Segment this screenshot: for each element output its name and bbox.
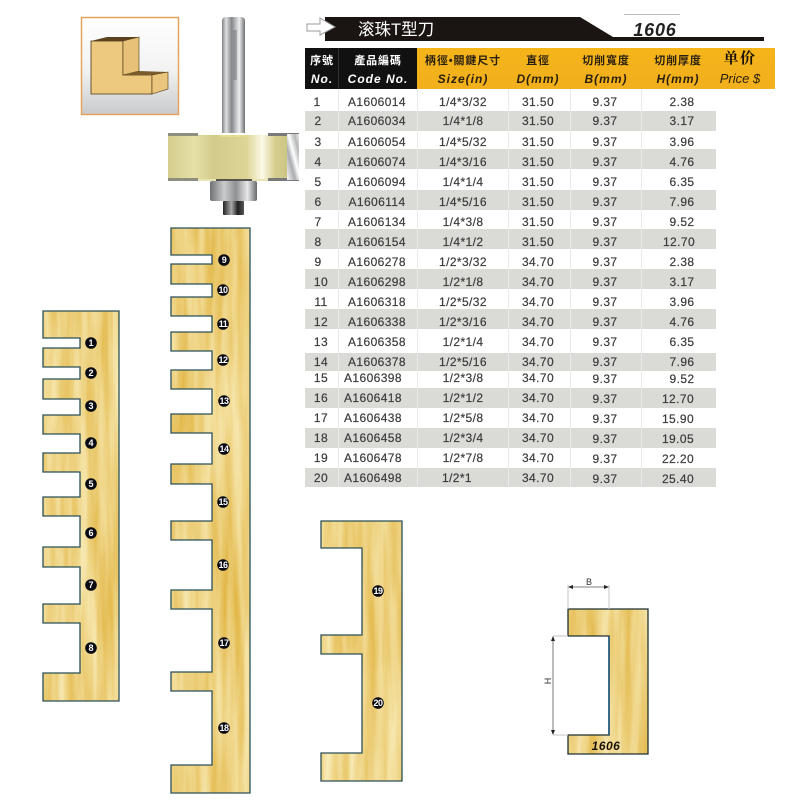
table rows: 31.50 [522,175,554,189]
table rows: 17 [314,411,328,425]
table header: 切削寬度 [582,53,630,67]
table rows: 1/2*5/32 [439,295,487,309]
table rows: 34.70 [522,411,554,425]
wood comb: cuts 9 to 18: 16 [218,560,228,570]
table rows: 1/4*3/8 [443,215,483,229]
table rows: 19 [314,451,328,465]
table rows: 1/2*1/4 [443,335,483,349]
table rows: 6.35 [670,175,694,189]
table header: Size(in) [438,72,488,86]
table header: D(mm) [516,72,560,86]
table rows: 9.37 [593,95,617,109]
table rows: A1606114 [348,195,406,209]
table rows: 6 [314,195,322,209]
table rows: 9 [314,255,322,269]
table rows: 6.35 [670,335,694,349]
table rows: 3 [314,135,322,149]
table rows: 1/2*5/16 [439,355,487,369]
table rows: 1/4*1/4 [443,175,483,189]
table rows: 1/4*5/32 [439,135,487,149]
table rows: 15 [314,371,328,385]
wood comb: cuts 1 to 8: 4 [88,438,94,448]
wood comb: cuts 1 to 8 [43,311,119,701]
table rows: A1606358 [348,335,406,349]
table rows: A1606398 [344,371,402,385]
table rows: 34.70 [522,255,554,269]
table rows: 4 [314,155,322,169]
table header: 切削厚度 [654,53,702,67]
table rows: 9.37 [593,195,617,209]
header banner: 滚珠T型刀 [358,20,434,39]
table rows: 9.37 [593,432,617,446]
table rows: 31.50 [522,135,554,149]
table rows: 16 [314,391,328,405]
table rows: A1606054 [348,135,406,149]
table rows: 8 [314,235,322,249]
table rows: 34.70 [522,451,554,465]
wood comb: cuts 1 to 8: 7 [88,580,94,590]
table rows: A1606378 [348,355,406,369]
wood comb: cuts 9 to 18: 15 [218,497,228,507]
table rows: 2.38 [670,255,694,269]
table rows: 2 [314,114,322,128]
table header: 產品編碼 [354,53,402,67]
table rows: 15.90 [662,412,694,426]
table rows: A1606498 [344,471,402,485]
wood comb: cuts 9 to 18: 9 [222,255,227,265]
table rows: 34.70 [522,371,554,385]
table rows: 9.37 [593,412,617,426]
table rows: 2.38 [670,95,694,109]
table rows: A1606418 [344,391,402,405]
table rows: 9.37 [593,452,617,466]
table header: H(mm) [656,72,700,86]
dimension diagram: B and H section [543,577,648,754]
table rows: 34.70 [522,335,554,349]
table rows: A1606074 [348,155,406,169]
table rows: 12.70 [662,392,694,406]
table rows: 9.37 [593,155,617,169]
table rows: A1606134 [348,215,406,229]
header banner: 1606 [633,20,677,40]
table rows: 31.50 [522,235,554,249]
table rows: 3.96 [670,135,694,149]
wood comb: cuts 19 and 20: 19 [373,586,383,596]
table rows: 13 [314,335,328,349]
table rows: 3.96 [670,295,694,309]
table rows: A1606458 [344,431,402,445]
table rows: 18 [314,431,328,445]
table rows [305,89,716,487]
table rows: 9.37 [593,392,617,406]
table rows: 1/4*3/32 [439,95,487,109]
table rows: 9.37 [593,372,617,386]
table rows: 9.37 [593,215,617,229]
table rows: 19.05 [662,432,694,446]
table rows: 1/2*3/32 [439,255,487,269]
table rows: 14 [314,355,328,369]
table rows: 7.96 [670,195,694,209]
table rows: 34.70 [522,275,554,289]
table rows: A1606478 [344,451,402,465]
dimension diagram: B and H section: 1606 [592,739,620,753]
table rows: 22.20 [662,452,694,466]
table header: Code No. [348,72,408,86]
table rows: 1/2*1 [442,471,472,485]
table rows: 31.50 [522,95,554,109]
table rows: 1/2*1/8 [443,275,483,289]
table header: No. [311,72,333,86]
table rows: 12 [314,315,328,329]
table rows: 9.37 [593,315,617,329]
table rows: 34.70 [522,391,554,405]
table rows: 5 [314,175,322,189]
table rows: 11 [314,295,328,309]
wood comb: cuts 9 to 18: 12 [218,355,228,365]
wood comb: cuts 1 to 8: 1 [88,338,94,348]
table rows: A1606338 [348,315,406,329]
table rows: 4.76 [670,315,694,329]
table rows: 1/2*3/16 [439,315,487,329]
table rows: A1606094 [348,175,406,189]
table rows: 9.37 [593,175,617,189]
table rows: 1 [313,95,321,109]
wood comb: cuts 9 to 18: 14 [219,444,229,454]
table header: 序號 [310,53,334,67]
wood comb: cuts 1 to 8: 2 [88,368,94,378]
wood comb: cuts 19 and 20: 20 [373,698,383,708]
table rows: 25.40 [662,472,694,486]
table rows: 3.17 [670,114,694,128]
table rows: 10 [314,275,328,289]
table rows: 12.70 [663,235,695,249]
table header [305,48,775,89]
table rows: 1/4*1/2 [443,235,483,249]
table rows: 1/4*1/8 [443,114,483,128]
table rows: A1606014 [348,95,406,109]
wood comb: cuts 9 to 18: 18 [219,723,229,733]
table header: 柄徑•關鍵尺寸 [425,53,501,67]
table rows: 9.37 [593,135,617,149]
table rows: 9.52 [670,215,694,229]
table rows: 31.50 [522,215,554,229]
table header: B(mm) [584,72,628,86]
table rows: 9.37 [593,255,617,269]
table rows: A1606438 [344,411,402,425]
table rows: 34.70 [522,471,554,485]
wood comb: cuts 9 to 18: 13 [219,396,229,406]
dimension diagram: B and H section: B [586,577,592,587]
table rows: 9.37 [593,335,617,349]
table rows: 9.37 [593,275,617,289]
table header: 单价 [723,49,757,67]
table rows: 1/4*5/16 [439,195,487,209]
wood comb: cuts 9 to 18: 11 [219,319,228,329]
table rows: 1/4*3/16 [439,155,487,169]
wood comb: cuts 19 and 20 [321,521,402,781]
table rows: A1606278 [348,255,406,269]
table rows: A1606318 [348,295,406,309]
wood comb: cuts 9 to 18: 10 [218,285,228,295]
table header: 直徑 [526,53,550,67]
table rows: 1/2*3/4 [443,431,483,445]
table rows: 9.37 [593,355,617,369]
wood comb: cuts 1 to 8: 5 [88,479,94,489]
table rows: 34.70 [522,315,554,329]
table rows: 9.37 [593,472,617,486]
table rows: 7 [314,215,322,229]
wood comb: cuts 1 to 8: 3 [88,401,94,411]
wood comb: cuts 9 to 18 [171,228,250,793]
table rows: 7.96 [670,355,694,369]
wood comb: cuts 1 to 8: 8 [88,643,94,653]
table rows: 9.52 [670,372,694,386]
table rows: A1606154 [348,235,406,249]
table rows: 1/2*7/8 [443,451,483,465]
table header: Price $ [720,71,761,86]
table rows: 20 [314,471,328,485]
table rows: 1/2*5/8 [443,411,483,425]
table rows: 9.37 [593,114,617,128]
table rows: A1606034 [348,114,406,128]
table rows: 3.17 [670,275,694,289]
header banner [307,14,764,41]
table rows: 9.37 [593,235,617,249]
table rows: 31.50 [522,155,554,169]
icon: router bit [168,17,299,215]
table rows: A1606298 [348,275,406,289]
table rows: 34.70 [522,295,554,309]
table rows: 34.70 [522,355,554,369]
table rows: 4.76 [670,155,694,169]
table rows: 9.37 [593,295,617,309]
table rows: 1/2*1/2 [443,391,483,405]
table rows: 34.70 [522,431,554,445]
table rows: 31.50 [522,195,554,209]
wood comb: cuts 1 to 8: 6 [88,528,94,538]
table rows: 31.50 [522,114,554,128]
table rows: 1/2*3/8 [443,371,483,385]
dimension diagram: B and H section: H [543,678,553,684]
wood comb: cuts 9 to 18: 17 [219,638,229,648]
icon: rabbet profile inset [82,18,178,114]
